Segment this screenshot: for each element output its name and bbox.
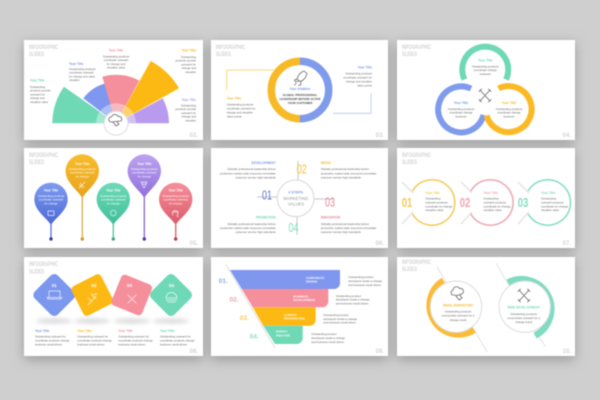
text: left: coordinate outreach for (227, 106, 256, 110)
yellow arc (430, 280, 474, 334)
text: third circle: Outstanding (541, 196, 556, 200)
text: media: MEDIA (321, 161, 332, 165)
ring text: YOUR CUSTOMER (288, 101, 312, 105)
slide heading: INFOGRAPHIC (402, 152, 431, 159)
number 03: 03 (518, 195, 528, 210)
step numbers: 04. (250, 334, 259, 340)
text: promotion: customer service high standards (235, 230, 276, 234)
panel: pins slide (24, 148, 203, 248)
text: media (321, 161, 377, 180)
text: media: Globally professional leadership before (321, 167, 369, 171)
panel: diamonds slide (24, 257, 203, 356)
slide heading: INFOGRAPHIC (29, 152, 58, 159)
pin: yellow (66, 154, 99, 241)
band descriptions: Outstanding product (348, 275, 374, 279)
text: green title: outreach for (30, 92, 45, 96)
right circle (499, 281, 550, 332)
text: second circle: outreach products (484, 200, 506, 204)
band descriptions: Outstanding product (311, 332, 337, 336)
text: innovation (321, 216, 377, 234)
text: right: change and visualize (346, 80, 372, 84)
text: innovation: INNOVATION (321, 216, 341, 220)
diamond 01 (31, 272, 77, 318)
number 02: 02 (297, 162, 307, 176)
panel: fan chart slide (24, 40, 203, 140)
panel: three rings slide (397, 40, 575, 140)
band descriptions: developed create a change (336, 298, 370, 302)
text: second circle: visualize value (484, 208, 502, 212)
text: first circle: outreach products (425, 200, 448, 204)
band descriptions: developed create a change (348, 279, 382, 283)
text: blue ring: business (455, 114, 467, 118)
text: left (227, 96, 256, 118)
number 01: 01 (262, 188, 272, 202)
page number: 08. (190, 349, 198, 355)
text: yellow title: outreach for (181, 62, 196, 66)
slide heading: INFOGRAPHIC (29, 261, 58, 268)
text: second circle (484, 191, 511, 212)
text: blue title (69, 62, 96, 82)
panel: four steps slide (211, 148, 388, 248)
slide heading: SLIDES (216, 51, 231, 58)
text: email marketing: EMAIL MARKETING (443, 304, 474, 308)
slide heading: INFOGRAPHIC (402, 259, 431, 266)
pin: blue: for change (44, 201, 58, 205)
band labels: PROSPECTING (284, 316, 306, 320)
diamond 01: 01 (52, 283, 57, 288)
pin: blue: Your Title (44, 188, 58, 192)
text: purple title: outreach for (181, 111, 196, 115)
diamond 03: 03 (127, 283, 132, 288)
page number: 04. (563, 133, 571, 139)
step numbers (219, 278, 259, 340)
text columns: Your Title (160, 329, 175, 333)
text: development (220, 161, 276, 180)
text: yellow title: products provide (175, 59, 196, 63)
text: green ring (472, 58, 499, 76)
text: green title: visualize value (30, 100, 49, 104)
text: purple title: visualize (185, 118, 196, 122)
text: purple title (175, 98, 196, 122)
text: web development: concentrate outreach for a (507, 316, 540, 320)
text: yellow title: change and (181, 66, 196, 70)
slide heading: SLIDES (402, 159, 417, 166)
text: green ring: Outstanding products (472, 64, 499, 68)
pin: purple: Outstanding products (131, 167, 158, 171)
band descriptions: Outstanding product (323, 313, 349, 317)
text: yellow title: Your Title (182, 48, 196, 52)
text: yellow title: visualize (185, 70, 196, 74)
band descriptions: developed create a change (311, 336, 345, 340)
pin: green: coordinate outreach (101, 198, 126, 202)
band labels: BUSINESS (293, 294, 308, 298)
panel: two circles slide (397, 257, 575, 356)
text: pink title: Outstanding products (103, 54, 129, 58)
text: promotion: PROMOTION (256, 216, 276, 220)
text columns: business result-driven (35, 342, 63, 346)
text: blue ring: Outstanding products (448, 107, 474, 111)
text: green title: change and (30, 96, 45, 100)
text: web development (507, 306, 540, 324)
text: promotion: Globally professional leadership before (227, 222, 276, 226)
icon: cloud hub (104, 111, 128, 135)
page number: 02. (190, 133, 198, 139)
text columns: coordinate products change (160, 338, 195, 342)
text: first circle: Outstanding (425, 196, 440, 200)
band descriptions (311, 275, 382, 344)
funnel bands (230, 270, 340, 344)
text: third circle: Your Title (541, 191, 556, 195)
text: pink title: coordinate outreach (104, 58, 129, 62)
band labels: CORPORATE (306, 276, 324, 280)
number 02: 02 (460, 195, 470, 210)
text: yellow ring: Your Title (502, 101, 516, 105)
text: email marketing: concentrate outreach for a (442, 314, 475, 318)
text: pink title: Your Title (109, 48, 123, 52)
ring text (279, 87, 321, 105)
slide heading: SLIDES (402, 51, 417, 58)
text columns: business result-driven (77, 342, 105, 346)
text columns: Your Title (77, 329, 92, 333)
text: green title (30, 78, 51, 104)
slide heading: SLIDES (29, 268, 44, 276)
text: media: productive market-wide resources immediate (321, 171, 377, 175)
text: blue title: visualize (69, 78, 80, 82)
text columns: Your Title (35, 329, 50, 333)
text: third circle: coordinate for change (541, 204, 568, 208)
number 04: 04 (288, 220, 298, 235)
number 03: 03 (325, 194, 335, 210)
ring text: LEADERSHIP BEFORE ACTIVE (279, 97, 321, 101)
text: right: Outstanding products (345, 72, 372, 76)
number 01: 01 (402, 195, 412, 210)
text: green ring: business (480, 72, 491, 76)
text: innovation: Globally professional leadership before (321, 222, 369, 226)
text columns: Outstanding outreach for (118, 334, 149, 338)
pin: red: Your Title (168, 188, 183, 192)
text: green title: Your Title (30, 78, 45, 82)
pin: purple (128, 154, 161, 241)
text: left: Your Title (227, 96, 241, 100)
step numbers: 01. (219, 278, 228, 285)
text: yellow title: Outstanding (181, 55, 196, 59)
text columns: coordinate products change (118, 338, 153, 342)
text: blue title: coordinate outreach (69, 71, 94, 75)
text: blue ring: Your Title (454, 101, 468, 105)
text: yellow title (175, 48, 196, 74)
text: innovation: customer service high standards (321, 230, 362, 234)
text: first circle (425, 191, 453, 212)
pin: blue: coordinate outreach (39, 198, 64, 202)
text: web development: WEB DEVELOPMENT (507, 306, 540, 310)
ring text: Your Initiative (290, 87, 311, 91)
text: left: Outstanding products (227, 102, 253, 106)
text: purple title: products provide (175, 107, 196, 111)
text: promotion: productive market-wide resources immediate (220, 226, 276, 230)
ring chart (271, 61, 329, 119)
slide heading: SLIDES (29, 51, 44, 58)
text: pink title: visualize value (107, 66, 126, 70)
band labels (276, 276, 324, 337)
pin: yellow: Outstanding products (69, 167, 96, 171)
text: pink title (103, 48, 130, 70)
circle arcs (412, 180, 570, 225)
text: development: DEVELOPMENT (251, 161, 276, 165)
text: development: customer service high standards (235, 176, 276, 180)
pin: green: Outstanding products (100, 194, 127, 198)
band descriptions: and business result-driven (311, 340, 344, 344)
band descriptions: Outstanding product (336, 294, 361, 298)
text: media: customer service high standards (321, 176, 362, 180)
text columns: business result-driven (118, 342, 146, 346)
floor shadows (36, 318, 189, 324)
icon: tools (479, 89, 491, 102)
slide heading: SLIDES (402, 266, 417, 273)
pin: blue: Outstanding products (38, 194, 64, 198)
pin: purple: for change (138, 174, 151, 178)
text: email marketing: change result (450, 318, 467, 322)
page number: 10. (563, 349, 571, 355)
text: blue title: Outstanding products (69, 67, 96, 71)
band labels: ANALYSIS (276, 333, 290, 337)
text: email marketing (442, 304, 475, 322)
pin: red: Outstanding products (162, 194, 189, 198)
text: green title: Outstanding (30, 85, 45, 89)
diagonal lines (437, 263, 545, 352)
pin: green: for change (107, 201, 120, 205)
text: blue ring: coordinate change (449, 111, 473, 115)
icon: tools (518, 289, 530, 302)
text: first circle: Your Title (425, 191, 440, 195)
text: left: change and visualize (227, 110, 253, 114)
fan wedges (52, 61, 179, 123)
text: third circle: visualize value (541, 208, 560, 212)
diamond 02 (70, 273, 114, 317)
band descriptions: and business result-driven (323, 321, 356, 325)
diamond 03 (110, 274, 153, 316)
text columns: coordinate products change (77, 338, 112, 342)
diamond 04 (148, 272, 194, 318)
text: green ring: coordinate change (474, 68, 497, 72)
pin: yellow: coordinate outreach (70, 171, 95, 175)
pin: yellow: Your Title (75, 162, 90, 166)
three ring arcs (438, 47, 532, 132)
text: development: productive market-wide resources immediate (220, 171, 276, 175)
text: yellow ring: coordinate change (497, 111, 521, 115)
step numbers: 02. (229, 296, 239, 304)
text: right: Your Title (358, 66, 372, 70)
page number: 09. (376, 349, 384, 355)
diamond 02: 02 (91, 283, 97, 288)
centre text: 4 STEPS (288, 190, 304, 194)
band descriptions: developed create a change (323, 317, 357, 321)
text: purple title: Outstanding (181, 104, 196, 108)
text: yellow ring: business (503, 114, 515, 118)
diamond 04: 04 (169, 283, 174, 288)
centre text: VALUES (288, 202, 304, 206)
pin: red: for change (169, 201, 183, 205)
text: development: Globally professional leadership before (227, 167, 276, 171)
text: green title: products provide (30, 89, 51, 93)
text columns (35, 329, 195, 346)
page number: 03. (376, 133, 384, 139)
band descriptions: and business result-driven (348, 283, 381, 287)
panel: numbered circles slide (397, 148, 575, 248)
centre text: MARKETING (284, 196, 308, 201)
text: first circle: coordinate for change (425, 204, 453, 208)
text: web development: change result (515, 320, 532, 324)
band labels: DESIGN (306, 280, 317, 284)
text: first circle: visualize value (425, 208, 444, 212)
text columns: Your Title (118, 329, 133, 333)
text: pink title: for change and (107, 62, 126, 66)
page number: 07. (563, 241, 571, 247)
text columns: Outstanding outreach for (160, 334, 191, 338)
ring text: GLOBAL PROFESSIONAL (283, 93, 317, 97)
text: blue title: for change and value (69, 74, 96, 78)
diagonal guide line (226, 264, 275, 348)
connector lines (227, 70, 371, 113)
slide heading: SLIDES (29, 159, 44, 166)
slide heading: INFOGRAPHIC (402, 44, 431, 51)
text: right (343, 66, 373, 88)
text: promotion (220, 216, 276, 234)
text: blue ring (448, 101, 475, 118)
text: right: coordinate outreach for (343, 76, 372, 80)
text: green ring: Your Title (478, 58, 493, 62)
text: third circle (541, 191, 568, 212)
text: second circle: Outstanding (484, 196, 499, 200)
centre circle (277, 180, 314, 217)
band labels: CLIENTS (284, 313, 296, 317)
text: purple title: Your Title (182, 98, 196, 102)
text: second circle: Your Title (484, 191, 498, 195)
text: second circle: coordinate for change (484, 204, 511, 208)
text: web development: Outstanding products (510, 312, 537, 316)
text: purple title: change and (181, 115, 196, 119)
pin: green (97, 183, 130, 241)
text: innovation: productive market-wide resources immediate (321, 226, 377, 230)
panel: funnel slide (211, 257, 388, 356)
slide heading: INFOGRAPHIC (216, 44, 245, 51)
panel shadows (24, 43, 575, 360)
band labels: DEVELOPMENT (293, 298, 316, 302)
text: email marketing: Outstanding products (445, 310, 471, 314)
text columns: Outstanding outreach for (77, 334, 108, 338)
page number: 05. (190, 241, 198, 247)
pin: purple: coordinate outreach (132, 171, 157, 175)
pin: purple: Your Title (137, 162, 152, 166)
left circle (430, 281, 482, 332)
text: yellow ring: Outstanding products (496, 107, 522, 111)
diagonal lines (402, 182, 529, 224)
text columns: Outstanding outreach for (35, 334, 66, 338)
centre text (284, 190, 308, 206)
band labels: SURVEY (276, 330, 288, 334)
text: right: value points (357, 84, 373, 88)
icon: cloud (451, 287, 463, 300)
slide heading: INFOGRAPHIC (29, 44, 58, 51)
text columns: coordinate products change (35, 338, 70, 342)
pin: red (159, 183, 192, 241)
text: yellow ring (496, 101, 523, 118)
text: left: value points (227, 114, 242, 118)
spokes (257, 161, 333, 235)
text: third circle: outreach products (541, 200, 564, 204)
icon: rocket (294, 71, 307, 86)
pin: blue (34, 183, 68, 241)
pin: yellow: for change (76, 174, 89, 178)
panel: ring slide (211, 40, 388, 140)
text columns: business result-driven (160, 342, 188, 346)
text: blue title: Your Title (69, 62, 84, 66)
step numbers: 03. (240, 315, 249, 322)
page number: 06. (376, 241, 384, 247)
pin: red: coordinate outreach (163, 198, 188, 202)
band descriptions: and business result-driven (336, 301, 369, 305)
pin: green: Your Title (106, 188, 121, 192)
green arc (508, 279, 551, 336)
